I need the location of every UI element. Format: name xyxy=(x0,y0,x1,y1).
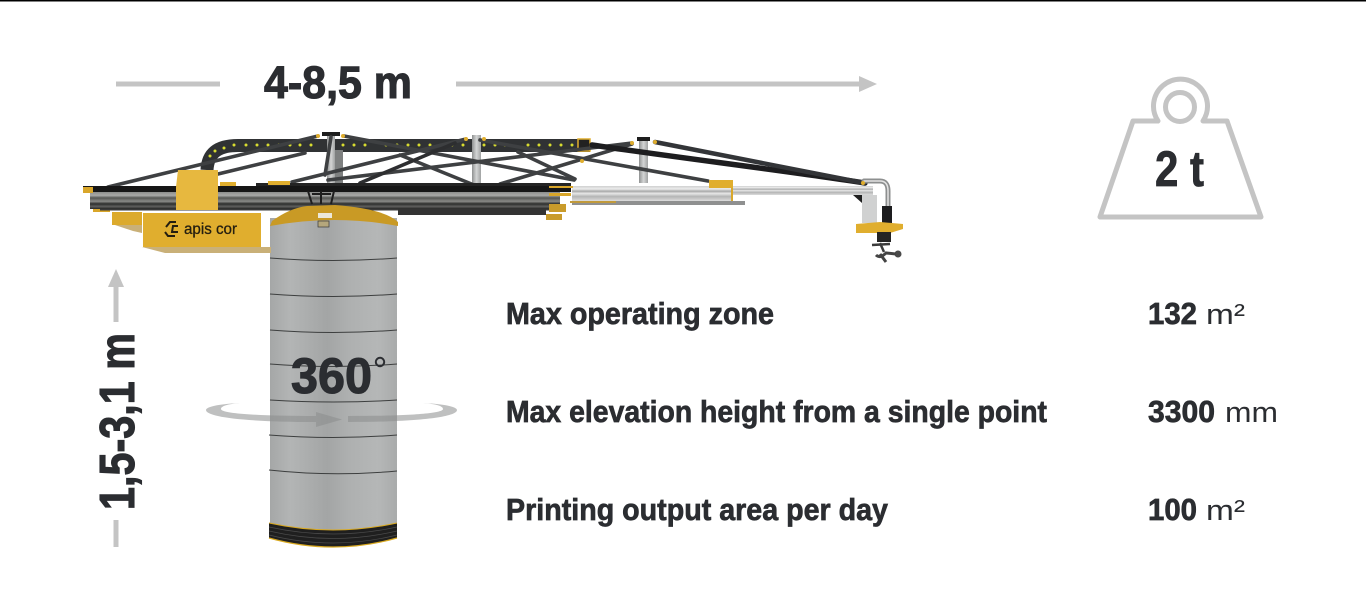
spec: max elevation height: mm xyxy=(1225,397,1278,429)
main beam and rails xyxy=(83,181,573,220)
spec: max elevation height: 3300 xyxy=(1148,394,1215,429)
logo: apis cor: apis cor xyxy=(184,221,238,238)
spec: max elevation height: Max elevation height from a single point xyxy=(506,394,1047,429)
truss posts xyxy=(322,132,650,186)
spec: max operating zone: m² xyxy=(1206,299,1245,331)
arrow: horizontal reach xyxy=(116,76,877,92)
spec: printing output area: 100 xyxy=(1148,492,1197,527)
top border line xyxy=(0,0,1366,2)
icon: weight 2 t: 2 t xyxy=(1155,141,1204,197)
crane printer illustration xyxy=(83,132,903,547)
cylindrical tower xyxy=(269,218,397,547)
yellow control box with logo xyxy=(93,203,271,253)
tower cap xyxy=(270,205,398,227)
arrow: vertical height xyxy=(108,269,124,547)
print head xyxy=(856,206,903,262)
spec: printing output area: m² xyxy=(1206,495,1245,527)
spec: max operating zone: Max operating zone xyxy=(506,296,774,331)
spec: printing output area: Printing output area per day xyxy=(506,492,889,527)
icon: weight 2 t xyxy=(1100,79,1261,217)
truss rods xyxy=(108,134,888,208)
heading: reach 4-8,5 m: 4-8,5 m xyxy=(264,57,412,108)
telescopic aluminium arm xyxy=(570,180,877,223)
yellow clamp on beam xyxy=(176,170,218,210)
label: rotation 360 degrees: 360 xyxy=(291,348,372,404)
spec: printing output area xyxy=(506,492,1245,527)
spec: max operating zone xyxy=(506,296,1245,331)
spec: max operating zone: 132 xyxy=(1148,296,1197,331)
heading: height 1,5-3,1 m: 1,5-3,1 m xyxy=(91,333,145,510)
arrow: rotation ring xyxy=(206,403,457,427)
cable chain xyxy=(207,139,590,170)
